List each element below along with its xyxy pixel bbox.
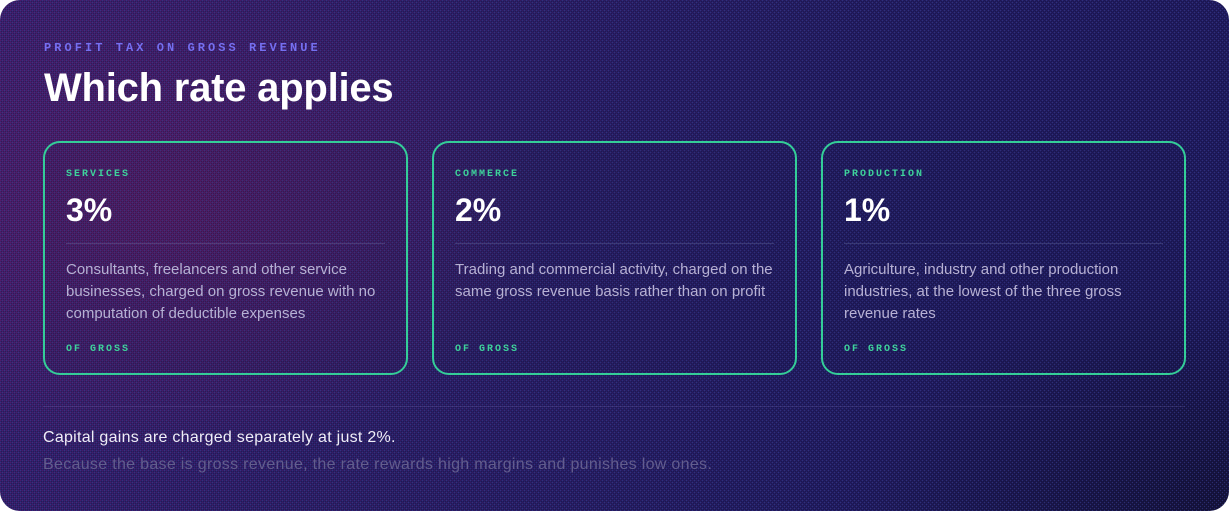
commerce label: COMMERCE	[455, 169, 519, 180]
commerce rate: 2%	[455, 192, 501, 228]
eyebrow label: PROFIT TAX ON GROSS REVENUE	[44, 41, 321, 55]
title: Which rate applies	[44, 66, 393, 110]
production description: industries, at the lowest of the three gross	[844, 283, 1122, 300]
production rate: 1%	[844, 192, 890, 228]
services description: businesses, charged on gross revenue with no	[66, 283, 375, 300]
footer note: Capital gains are charged separately at just 2%.	[43, 429, 396, 446]
production description: Agriculture, industry and other production	[844, 261, 1118, 278]
commerce description: same gross revenue basis rather than on profit	[455, 283, 765, 300]
production description	[844, 261, 1122, 322]
services footnote: OF GROSS	[66, 344, 130, 355]
commerce footnote: OF GROSS	[455, 344, 519, 355]
services description	[66, 261, 375, 322]
production footnote: OF GROSS	[844, 344, 908, 355]
footer caption: Because the base is gross revenue, the rate rewards high margins and punishes low ones.	[43, 456, 712, 473]
panel: commerce	[432, 141, 797, 375]
services description: computation of deductible expenses	[66, 305, 305, 322]
panel: production	[821, 141, 1186, 375]
services description: Consultants, freelancers and other service	[66, 261, 347, 278]
panel: services	[43, 141, 408, 375]
services label: SERVICES	[66, 169, 130, 180]
services rate: 3%	[66, 192, 112, 228]
production description: revenue rates	[844, 305, 936, 322]
production label: PRODUCTION	[844, 169, 924, 180]
commerce description: Trading and commercial activity, charged on the	[455, 261, 773, 278]
commerce description	[455, 261, 773, 300]
